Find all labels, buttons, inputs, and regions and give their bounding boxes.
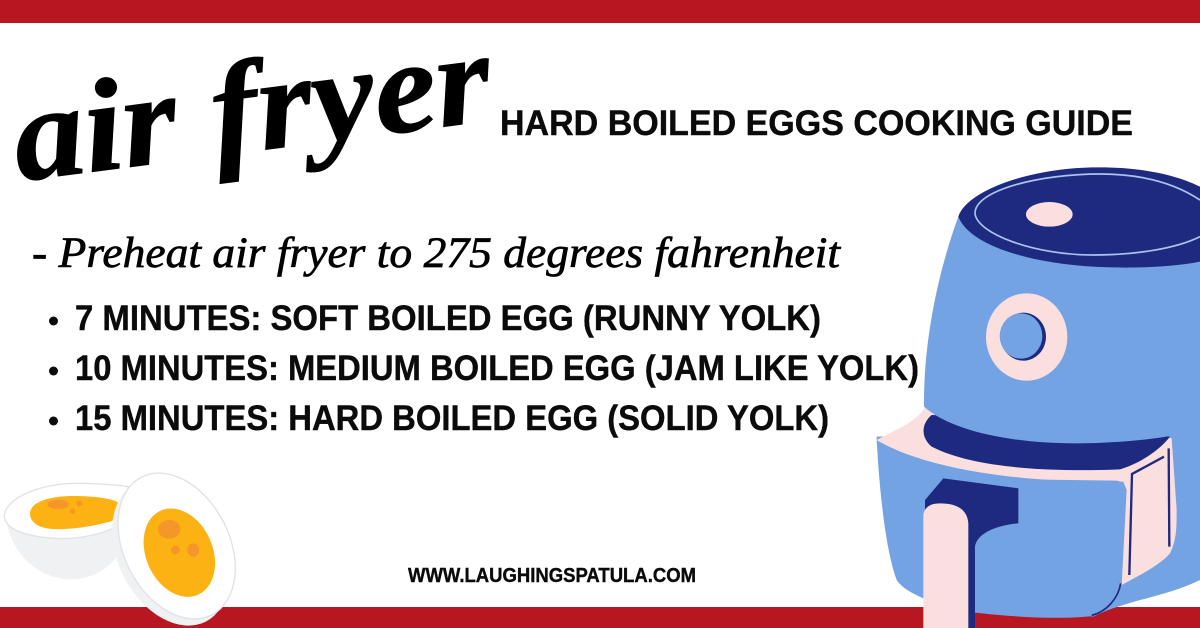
label panel lines [1129, 448, 1169, 575]
dark crescent under body [924, 415, 1170, 470]
bottom red band [0, 607, 1200, 628]
website url: WWW.LAUGHINGSPATULA.COM [408, 565, 696, 587]
basket edge shadow [1092, 583, 1121, 615]
basket pink rim and label panel [877, 407, 1177, 585]
item: 15 minutes: 15 MINUTES: HARD BOILED EGG (SOLID YOLK) [75, 399, 829, 438]
icon: boiled eggs [4, 453, 259, 628]
basket front panel [943, 478, 1125, 618]
basket back [877, 430, 1200, 617]
left egg half [4, 483, 128, 579]
lid inner ring [975, 174, 1200, 255]
item: 7 minutes: 7 MINUTES: SOFT BOILED EGG (RUNNY YOLK) [75, 299, 821, 338]
lid knob [1026, 202, 1073, 227]
top red band [0, 0, 1200, 23]
icon: air fryer [877, 167, 1200, 628]
dark handle mount [925, 478, 1018, 628]
top lid [958, 167, 1200, 268]
heading: cooking guide: HARD BOILED EGGS COOKING GUIDE [500, 104, 1133, 143]
item: 10 minutes: 10 MINUTES: MEDIUM BOILED EGG (JAM LIKE YOLK) [75, 349, 919, 388]
title: air fryer script: air fryer [4, 3, 501, 210]
handle [923, 503, 968, 628]
fryer body [924, 183, 1200, 443]
right egg half [89, 453, 259, 628]
cooking times list [49, 299, 919, 438]
control dial [986, 293, 1067, 381]
preheat instruction: - Preheat air fryer to 275 degrees fahrenheit [32, 230, 841, 277]
